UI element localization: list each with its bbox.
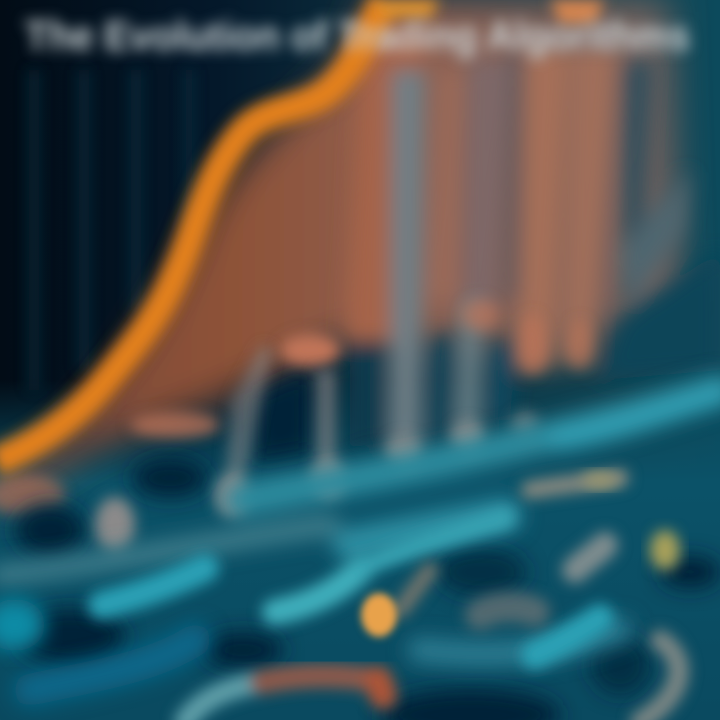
salmon highlights [0,299,592,515]
grey streaks [400,478,679,720]
data point stems [95,345,539,553]
dark pockets under the curve [15,458,720,720]
teal ribbons [0,390,720,690]
glowing orange node [361,593,397,637]
orange trend curve [0,0,605,462]
cyan blob at left edge [0,599,45,651]
vertical background stripes [28,70,194,390]
olive node [650,530,680,570]
small amber tint [582,472,618,488]
bottom orange and cyan arc [185,676,383,720]
vertical chart columns [255,30,720,460]
bright cyan strokes [102,518,600,655]
area fill under the orange curve [0,0,680,510]
lower teal field [0,380,720,720]
